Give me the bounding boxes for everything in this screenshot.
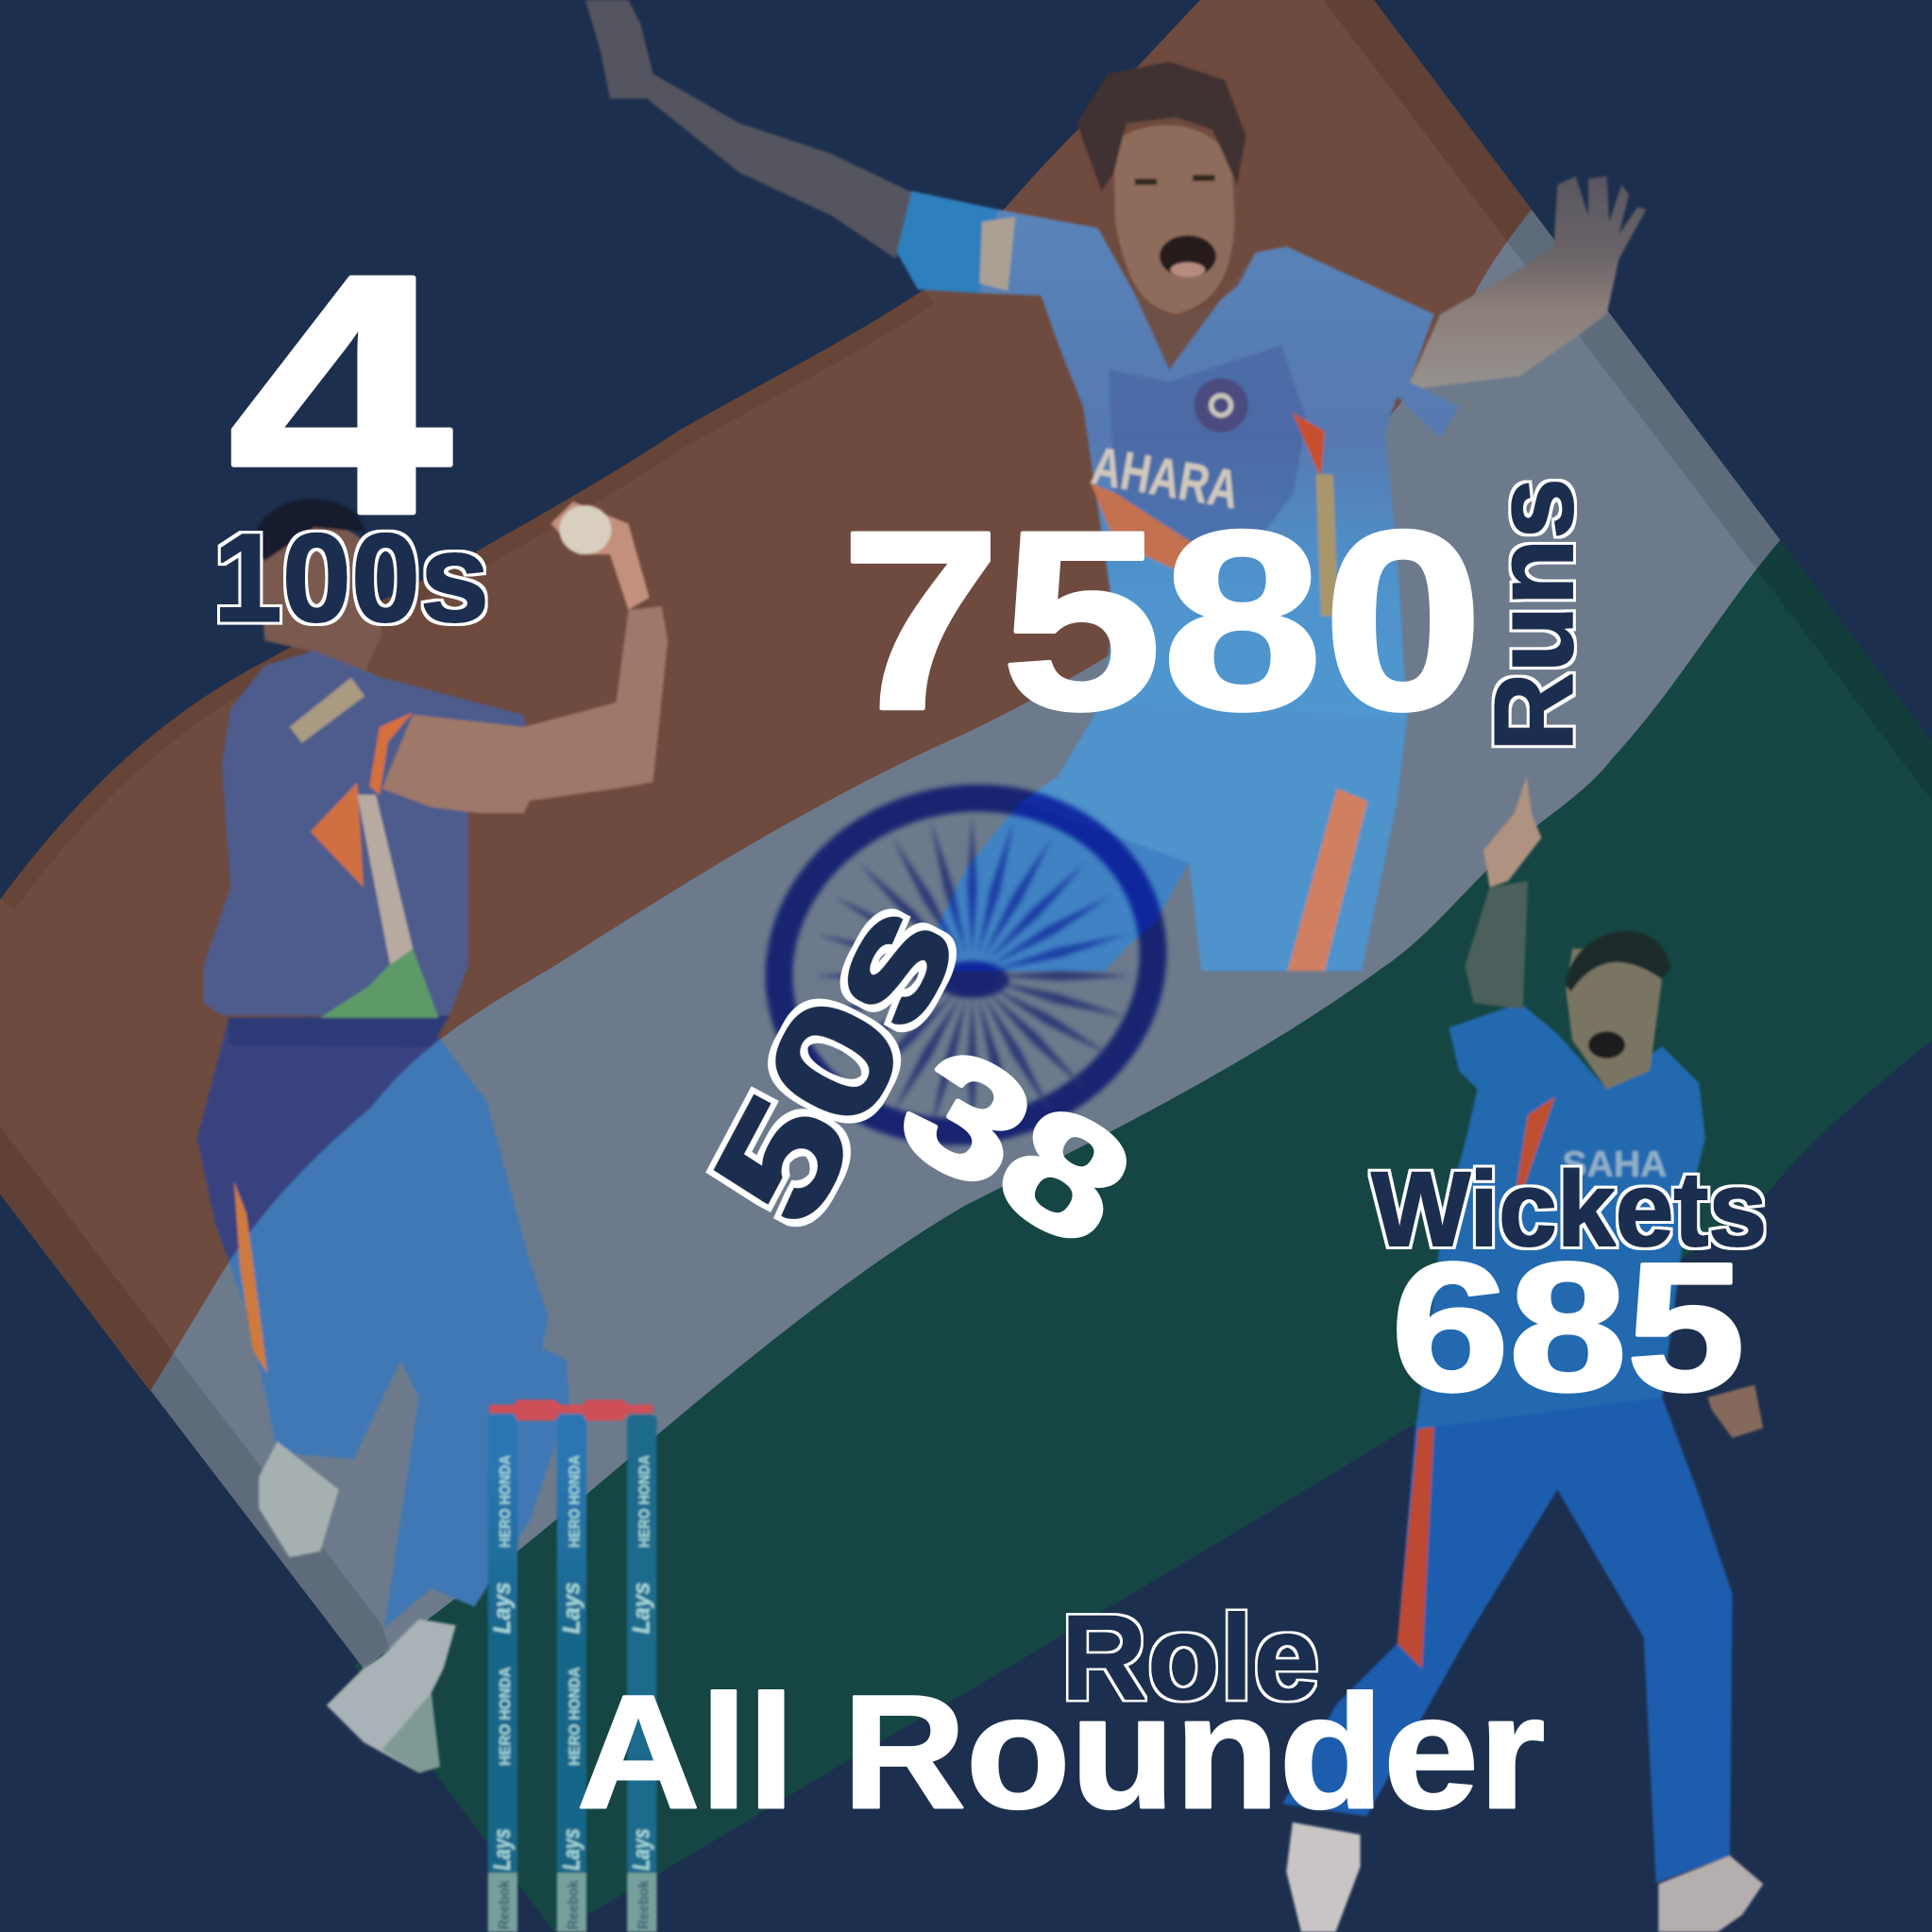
stump branding: Reebok	[566, 1880, 582, 1929]
stump branding: HERO HONDA	[567, 1455, 583, 1548]
number 38: 38	[873, 1011, 1160, 1281]
torso	[1415, 1003, 1705, 1430]
gold shirt stripe	[1316, 474, 1338, 616]
front shoe toe shade	[382, 1693, 440, 1773]
stump branding: Lays	[630, 1582, 655, 1634]
india chakra	[741, 756, 1191, 1173]
emblem centre	[1212, 396, 1231, 415]
trousers	[918, 703, 1407, 971]
hair	[1566, 931, 1670, 991]
white chest stripe	[357, 795, 413, 974]
orange sponsor slash	[1091, 483, 1220, 573]
collar shade	[1132, 252, 1256, 369]
stat: 685 wickets	[1371, 1149, 1767, 1429]
head	[256, 524, 382, 675]
stump branding: HERO HONDA	[637, 1455, 653, 1548]
sleeve edge	[369, 712, 413, 795]
bails	[489, 1399, 653, 1420]
cricket ball	[559, 505, 611, 554]
raised arm	[1465, 881, 1528, 1009]
chest shade	[1109, 345, 1306, 554]
fist	[1708, 1385, 1763, 1438]
player: celebrating bowler right	[1282, 776, 1763, 1932]
bowling hand	[551, 501, 650, 610]
stump branding: HERO HONDA	[567, 1667, 583, 1766]
trousers	[1282, 1398, 1733, 1883]
orange chest stripe	[311, 783, 364, 887]
stump branding: HERO HONDA	[498, 1455, 514, 1548]
green chest stripe	[320, 949, 439, 1018]
flag: darker edge strip left	[0, 1127, 407, 1701]
chakra ring	[741, 756, 1191, 1173]
chakra hub	[935, 961, 1009, 998]
trousers	[197, 1022, 569, 1628]
chakra spokes	[812, 816, 1132, 1136]
stump branding: Reebok	[497, 1880, 513, 1929]
number 7580: 7580	[840, 478, 1483, 763]
eyes	[1135, 175, 1215, 185]
trousers over saffron	[196, 1022, 440, 1262]
mouth	[1160, 235, 1216, 278]
hair	[252, 499, 366, 561]
flag: green band	[355, 538, 1932, 1932]
trouser stripe	[1288, 788, 1367, 971]
stump left	[488, 1415, 517, 1875]
label 100s: 100s	[213, 509, 489, 649]
waistband	[228, 1015, 449, 1047]
shirt sponsor text: SAHA	[1563, 1144, 1667, 1185]
neck and face	[1566, 949, 1662, 1089]
label Wickets: Wickets	[1371, 1149, 1767, 1268]
stump middle	[557, 1415, 586, 1875]
wrist band	[897, 191, 998, 294]
stump right	[627, 1415, 656, 1875]
flag: darker edge strip right	[1323, 0, 1932, 801]
stump branding: Lays	[490, 1828, 516, 1871]
shirt	[203, 651, 527, 1015]
flag: saffron top edge shade	[0, 290, 924, 900]
hair	[1076, 61, 1246, 191]
flag: saffron band	[0, 0, 1532, 1391]
stump branding: HERO HONDA	[498, 1667, 514, 1766]
stat: 7580 runs	[840, 478, 1596, 763]
left shoe	[1286, 1822, 1361, 1932]
trouser stripe	[234, 1181, 267, 1374]
stump branding: Lays	[559, 1582, 585, 1634]
stat: 38 fifties	[680, 873, 1160, 1281]
right shoe	[1658, 1856, 1763, 1932]
stump branding	[490, 1455, 655, 1929]
sponsor patch	[290, 678, 364, 743]
label Role: Role	[1060, 1590, 1319, 1725]
shirt sponsor text: AHARA	[1087, 435, 1244, 520]
player: appealing bowler top centre	[585, 0, 1646, 971]
red shirt trim	[1293, 413, 1325, 478]
red shirt stripe	[1509, 1096, 1555, 1232]
trouser lower left shade	[918, 802, 1189, 971]
stat: 4 hundreds	[213, 204, 489, 649]
value All Rounder: All Rounder	[577, 1662, 1545, 1842]
trouser stripe	[1398, 1422, 1434, 1669]
mouth	[1588, 1031, 1625, 1059]
player: bowler left	[197, 499, 668, 1773]
emblem	[1194, 379, 1248, 432]
label Runs: Runs	[1472, 478, 1596, 752]
stump bases	[488, 1873, 656, 1932]
raised left arm	[585, 0, 914, 259]
stump branding: Lays	[490, 1582, 516, 1634]
flag: white band	[0, 0, 1782, 1669]
raised hand	[1483, 776, 1541, 887]
stump branding: Reebok	[636, 1880, 652, 1929]
stump branding: Lays	[630, 1828, 655, 1871]
shirt	[979, 210, 1459, 720]
number 4: 4	[228, 204, 455, 585]
number 685: 685	[1391, 1225, 1745, 1429]
label 50s: 50s	[680, 873, 991, 1249]
face	[1114, 125, 1234, 314]
role: all rounder	[577, 1590, 1545, 1842]
stump branding: Lays	[559, 1828, 585, 1871]
cricket stumps	[488, 1399, 656, 1932]
tongue	[1171, 263, 1205, 278]
front shoe	[327, 1619, 456, 1773]
rear shoe	[259, 1442, 339, 1557]
arm	[382, 606, 668, 813]
right arm and hand	[1410, 177, 1646, 388]
sleeve badge	[979, 217, 1015, 291]
